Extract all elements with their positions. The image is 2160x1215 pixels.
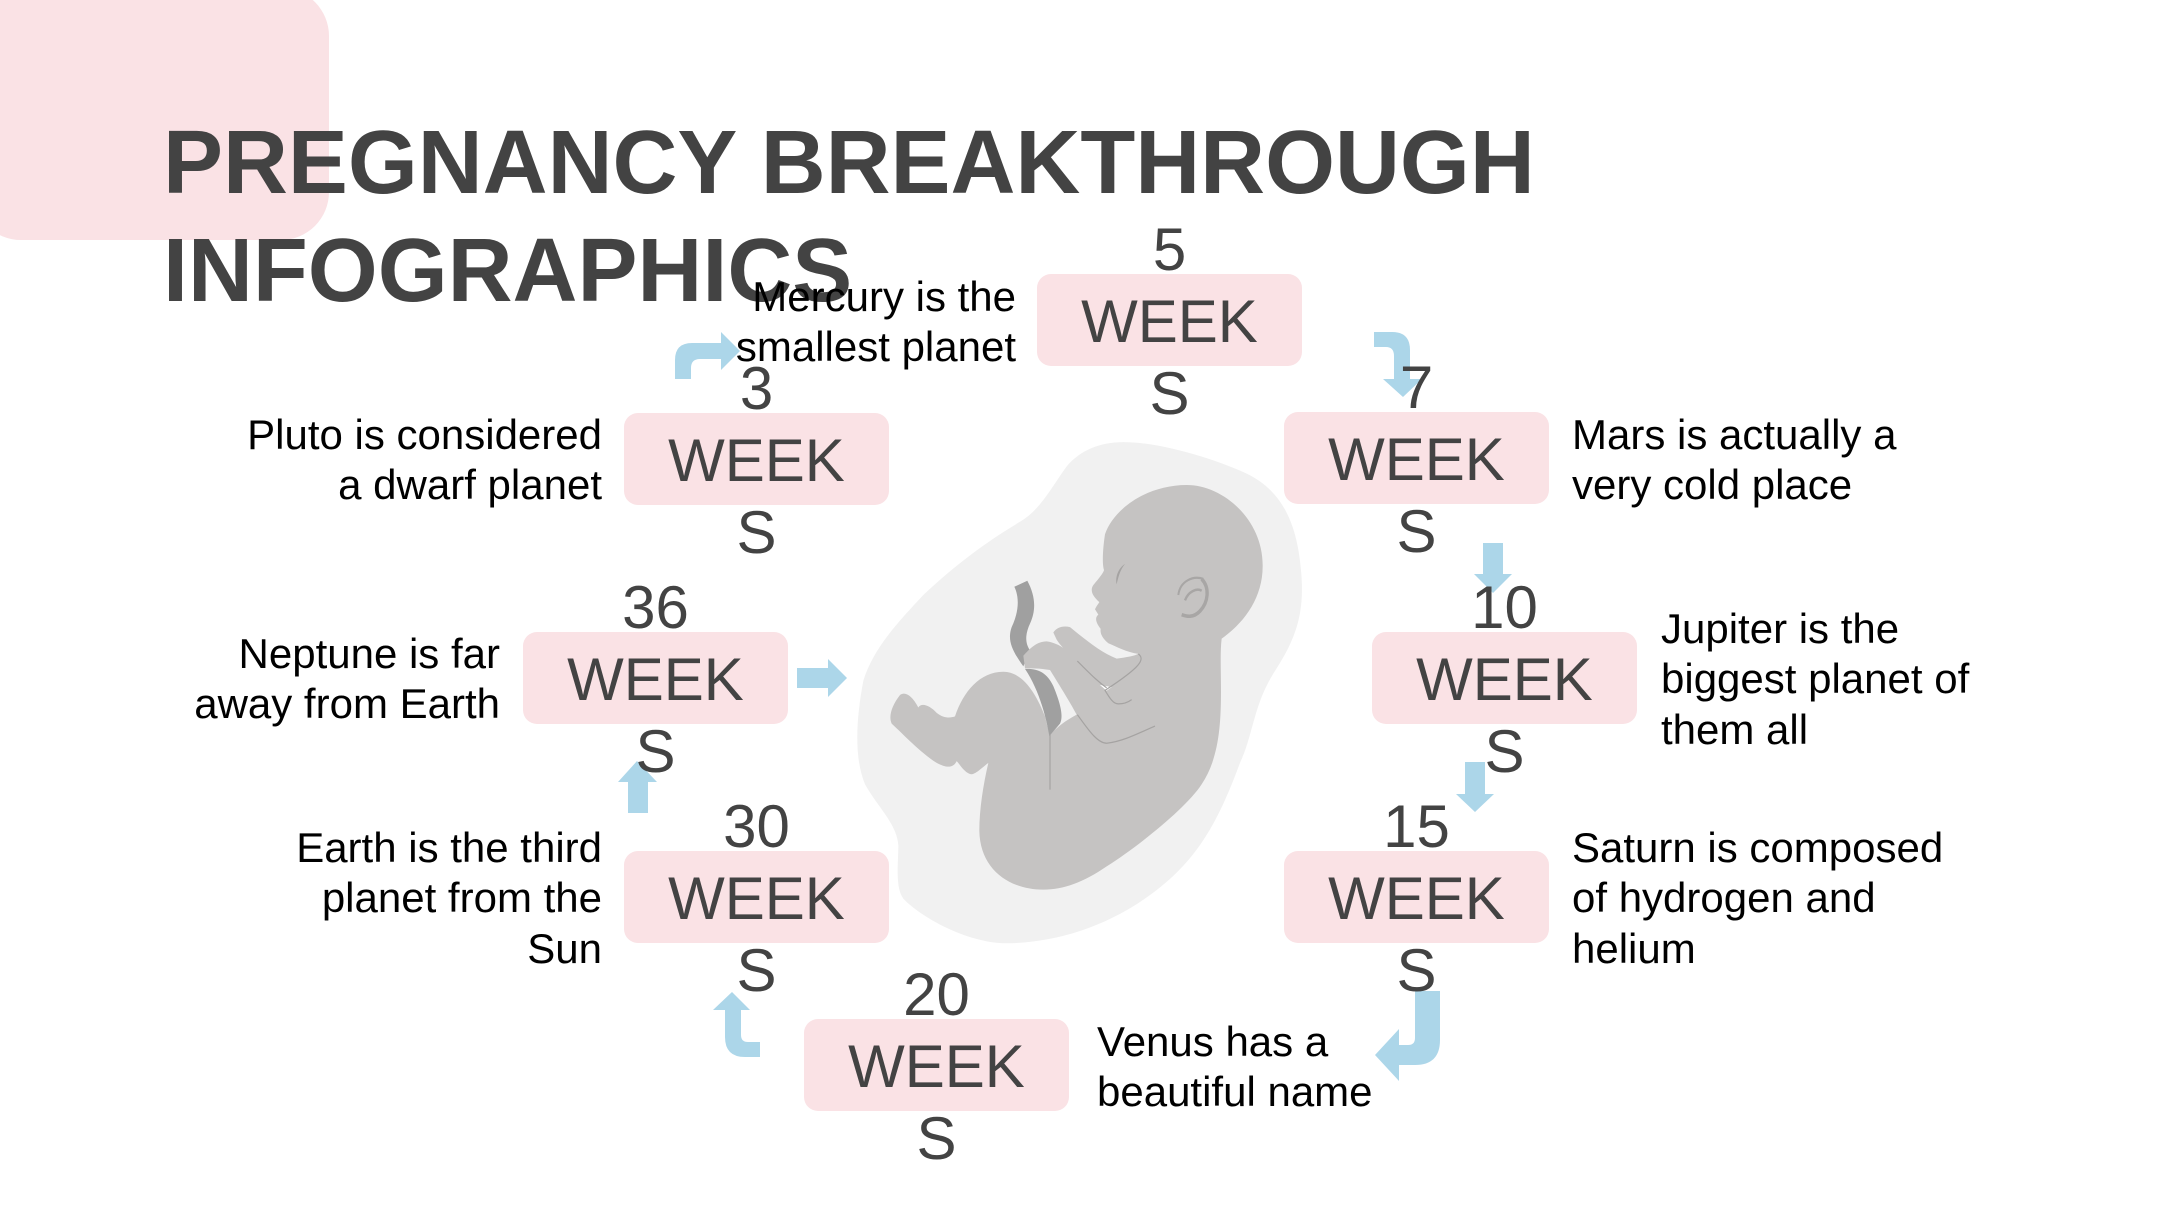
text: Neptune: away from Earth bbox=[194, 680, 500, 727]
fetus body bbox=[890, 485, 1263, 890]
week 3 bbox=[624, 355, 889, 566]
week 20 bbox=[804, 961, 1069, 1172]
arrow: week 36 to centre bbox=[797, 659, 847, 697]
week 7: S bbox=[1396, 498, 1437, 565]
body lines bbox=[1050, 654, 1155, 790]
cycle arrows bbox=[618, 332, 1512, 1081]
arrow: week 15 to 20 bbox=[1375, 991, 1440, 1081]
title bbox=[163, 113, 1535, 321]
text: Mars: very cold place bbox=[1572, 461, 1852, 508]
week 15: S bbox=[1396, 937, 1437, 1004]
week 15 bbox=[1284, 793, 1549, 1004]
text: Mars: Mars is actually a bbox=[1572, 411, 1896, 458]
text: Jupiter: them all bbox=[1661, 706, 1808, 753]
arrow: week 30 to 36 bbox=[618, 761, 657, 813]
text: Earth: Earth is the third bbox=[296, 824, 602, 871]
text: Venus: Venus has a bbox=[1097, 1018, 1328, 1065]
week 3: S bbox=[736, 499, 777, 566]
week 30: WEEK bbox=[668, 865, 845, 932]
decorative pink corner panel bbox=[0, 0, 329, 240]
week 20: WEEK bbox=[848, 1033, 1025, 1100]
text: Jupiter: Jupiter is the bbox=[1661, 605, 1899, 652]
week 7: 7 bbox=[1400, 354, 1433, 421]
week 15: 15 bbox=[1383, 793, 1450, 860]
text: Earth: Sun bbox=[527, 925, 602, 972]
week 36: WEEK bbox=[567, 646, 744, 713]
wrist gap bbox=[1100, 685, 1112, 691]
week 7: WEEK bbox=[1328, 426, 1505, 493]
text: Mercury bbox=[736, 273, 1016, 370]
week 7 bbox=[1284, 354, 1549, 565]
week 10: S bbox=[1484, 718, 1525, 785]
week 3: WEEK bbox=[668, 427, 845, 494]
umbilical cord, lower part bbox=[1025, 669, 1062, 736]
week 36 bbox=[523, 574, 788, 785]
week 10: WEEK bbox=[1416, 646, 1593, 713]
umbilical cord, upper part bbox=[1010, 581, 1034, 666]
week 10 bbox=[1372, 574, 1637, 785]
arrow: week 7 to 10 bbox=[1474, 543, 1512, 593]
week 5: WEEK bbox=[1081, 288, 1258, 355]
text: Mercury: Mercury is the bbox=[752, 273, 1016, 320]
text: Mercury: smallest planet bbox=[736, 323, 1016, 370]
text: Venus bbox=[1097, 1018, 1373, 1115]
text: Saturn: Saturn is composed bbox=[1572, 824, 1943, 871]
text: Earth: planet from the bbox=[322, 874, 602, 921]
arrow: week 3 to 5 bbox=[675, 332, 740, 379]
title: INFOGRAPHICS bbox=[163, 221, 852, 321]
week 20: S bbox=[916, 1105, 957, 1172]
text: Pluto: a dwarf planet bbox=[338, 461, 602, 508]
text: Saturn: of hydrogen and bbox=[1572, 874, 1876, 921]
week 10: 10 bbox=[1471, 574, 1538, 641]
text: Neptune bbox=[194, 630, 500, 727]
week 15: WEEK bbox=[1328, 865, 1505, 932]
text: Pluto: Pluto is considered bbox=[247, 411, 602, 458]
womb shape bbox=[857, 442, 1302, 943]
week 5 bbox=[1037, 216, 1302, 427]
week 36: 36 bbox=[622, 574, 689, 641]
week 30 bbox=[624, 793, 889, 1004]
text: Saturn: helium bbox=[1572, 925, 1696, 972]
week 30: S bbox=[736, 937, 777, 1004]
text: Pluto bbox=[247, 411, 602, 508]
ear bbox=[1178, 578, 1207, 616]
title: PREGNANCY BREAKTHROUGH bbox=[163, 113, 1535, 213]
text: Mars bbox=[1572, 411, 1896, 508]
week 5: 5 bbox=[1153, 216, 1186, 283]
text: Jupiter: biggest planet of bbox=[1661, 655, 1969, 702]
text: Saturn bbox=[1572, 824, 1943, 972]
arrow: week 20 to 30 bbox=[713, 992, 760, 1057]
arrow: week 10 to 15 bbox=[1456, 762, 1494, 812]
text: Neptune: Neptune is far bbox=[239, 630, 500, 677]
arrow: week 5 to 7 bbox=[1374, 332, 1422, 397]
text: Jupiter bbox=[1661, 605, 1970, 753]
week 5: S bbox=[1149, 360, 1190, 427]
text: Venus: beautiful name bbox=[1097, 1068, 1373, 1115]
text: Earth bbox=[296, 824, 602, 972]
week 3: 3 bbox=[740, 355, 773, 422]
week 20: 20 bbox=[903, 961, 970, 1028]
week 30: 30 bbox=[723, 793, 790, 860]
eye bbox=[1116, 564, 1125, 584]
week 36: S bbox=[635, 718, 676, 785]
